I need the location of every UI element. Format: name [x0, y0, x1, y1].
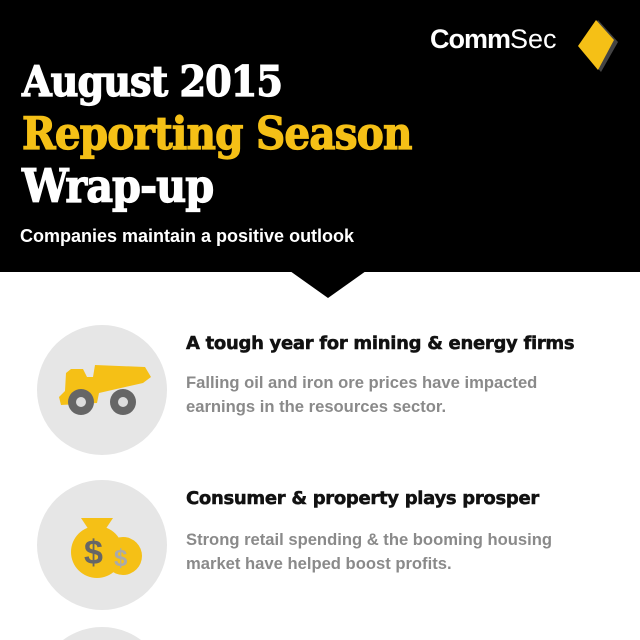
icon: diamond: [578, 20, 618, 72]
heading: A tough year for mining & energy firms: [186, 333, 574, 354]
text: market have helped boost profits.: [186, 554, 452, 573]
icon: money bags: $: [84, 534, 103, 572]
arrow: pointer: [292, 272, 364, 298]
title: Reporting Season: [22, 107, 412, 160]
item: mining: [37, 325, 574, 455]
title: Wrap-up: [22, 159, 213, 213]
text: [186, 373, 537, 416]
text: Falling oil and iron ore prices have impacted: [186, 373, 537, 392]
logo: CommSec: CommSec: [430, 24, 557, 54]
subtitle: Companies maintain a positive outlook: [20, 226, 354, 246]
header panel: [0, 0, 640, 272]
heading: Consumer & property plays prosper: [186, 488, 539, 509]
icon: truck: [37, 325, 167, 455]
title: August 2015: [22, 57, 282, 107]
text: [186, 530, 552, 573]
item: consumer: [37, 480, 552, 610]
text: earnings in the resources sector.: [186, 397, 446, 416]
text: Strong retail spending & the booming housing: [186, 530, 552, 549]
circle: next item (clipped): [63, 627, 141, 640]
icon: money bags: $: [114, 545, 128, 572]
icon: money bags: [37, 480, 167, 610]
title: [21, 57, 412, 213]
